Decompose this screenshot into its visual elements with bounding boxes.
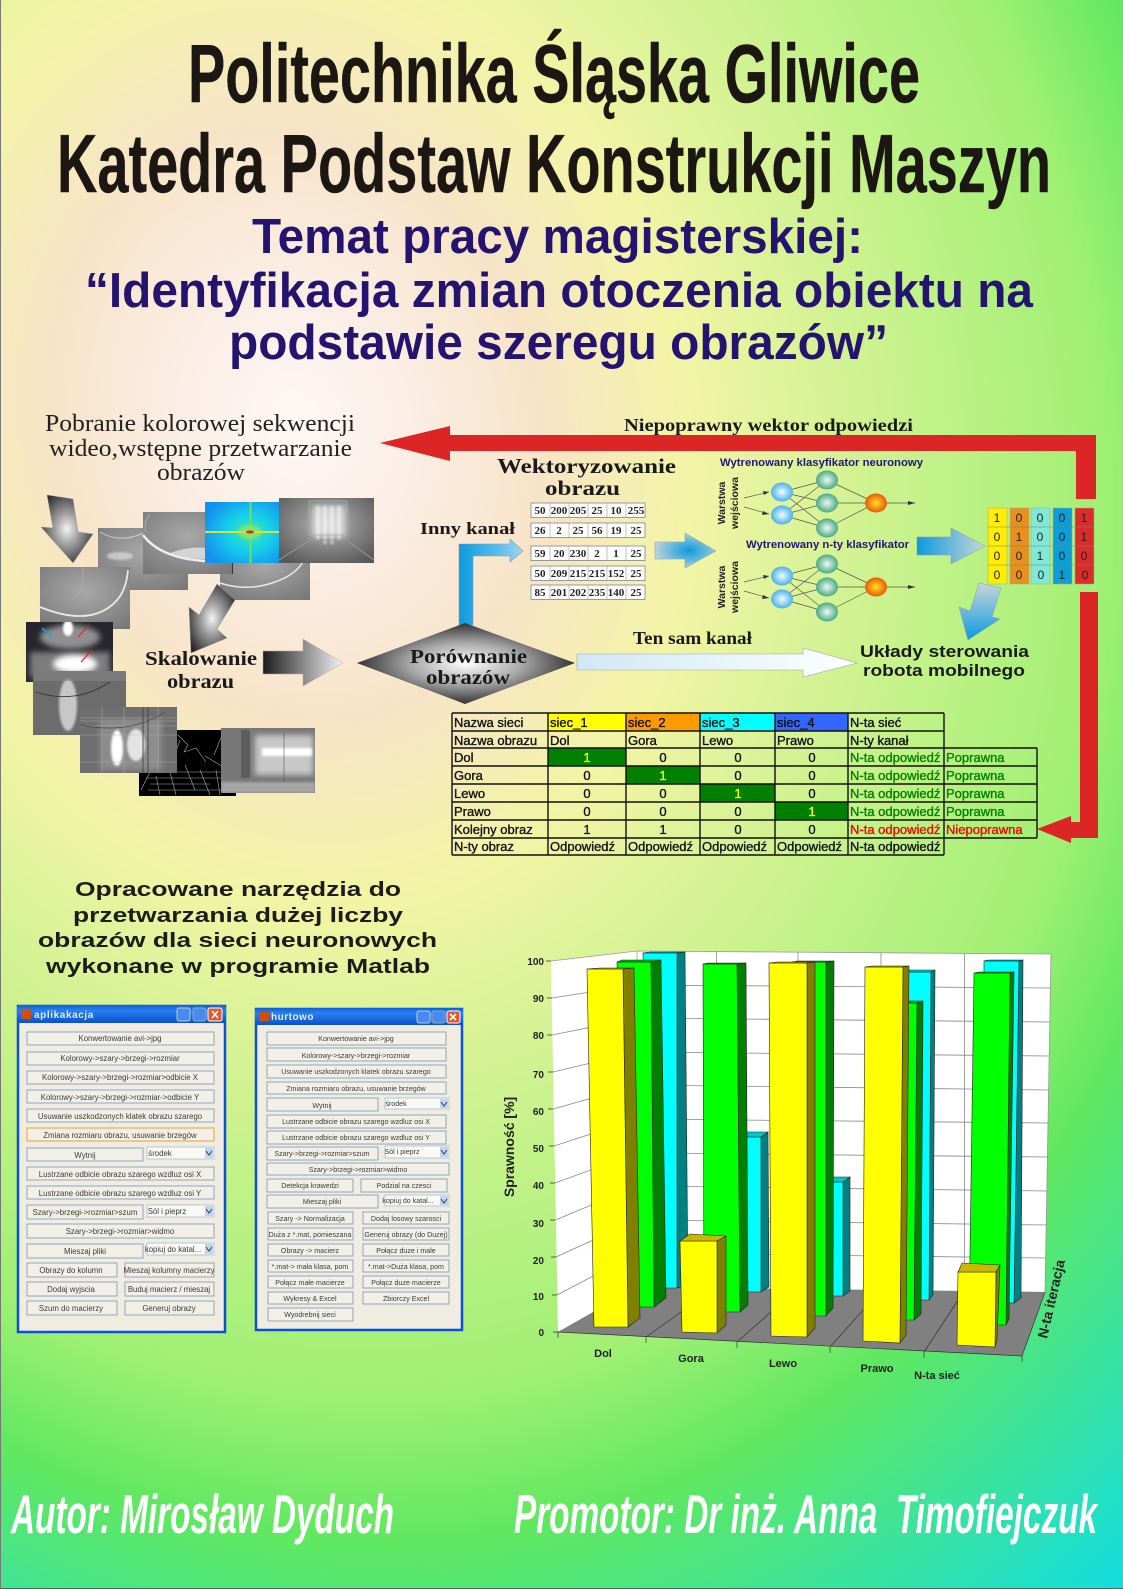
label: Niepoprawny wektor odpowiedzi: Niepoprawny wektor odpowiedzi	[624, 415, 913, 435]
results table	[452, 713, 1037, 855]
subtitle: podstawie szeregu obrazów”	[229, 316, 888, 370]
window: hurtowo: *.mat-> mała klasa, pom	[272, 1263, 348, 1271]
label: Skalowanie obrazu: Skalowanie	[145, 648, 257, 670]
results table: 1	[734, 786, 742, 801]
results table: 1	[659, 768, 667, 783]
y axis labels: 70	[533, 1070, 544, 1081]
window: hurtowo: Usuwanie uszkodzonych klatek obrazu szarego	[281, 1068, 431, 1076]
window: hurtowo: Połącz duze macierze	[371, 1279, 441, 1287]
output vector matrix: 0	[994, 549, 1001, 563]
number matrix: 255	[628, 505, 645, 517]
window: hurtowo: Detekcja krawedzi	[281, 1182, 339, 1190]
results table: 0	[808, 750, 816, 765]
neural network: top: wejściowa	[729, 477, 741, 530]
results table: 0	[734, 822, 742, 837]
output vector matrix	[988, 508, 1094, 584]
output vector matrix: 1	[1016, 530, 1023, 544]
image collage	[26, 498, 374, 796]
window: hurtowo: Obrazy -> macierz	[281, 1247, 340, 1255]
number matrix: 56	[592, 525, 603, 537]
window: aplikakacja: Obrazy do kolumn	[39, 1266, 103, 1275]
window: aplikakacja: Konwertowanie avi->jpg	[78, 1034, 162, 1043]
results table: Gora	[628, 733, 658, 748]
y axis labels: 60	[533, 1107, 544, 1118]
label: Skalowanie obrazu: obrazu	[167, 671, 234, 693]
results table: Poprawna	[946, 786, 1005, 801]
results table: 1	[583, 750, 591, 765]
heading: Wektoryzowanie obrazu: Wektoryzowanie	[497, 454, 676, 478]
results table: 0	[808, 822, 816, 837]
results table: Poprawna	[946, 804, 1005, 819]
output vector matrix: 0	[994, 530, 1001, 544]
y axis labels: 40	[533, 1181, 544, 1192]
output vector matrix: 0	[1038, 568, 1045, 582]
results table: Poprawna	[946, 768, 1005, 783]
window: hurtowo: Konwertowanie avi->jpg	[318, 1035, 394, 1043]
photo: pipe view 4	[40, 567, 130, 629]
results table: 1	[659, 822, 667, 837]
photo: processed interior with stripes	[80, 707, 177, 773]
window: hurtowo: Duża z *.mat, pomieszana	[269, 1231, 351, 1239]
number matrix: 202	[570, 587, 587, 599]
number matrix: 25	[630, 525, 642, 537]
arrow: other channel	[459, 539, 523, 625]
window: hurtowo: Sól i pieprz	[384, 1148, 420, 1156]
heading: Wektoryzowanie obrazu: obrazu	[545, 476, 620, 500]
arrow: down into images	[41, 495, 93, 563]
subtitle	[85, 210, 1034, 370]
3D bar chart	[501, 951, 1068, 1382]
window: aplikakacja: Szary->brzegi->rozmiar>szum	[33, 1208, 137, 1217]
decision diamond: Porównanie obrazów: obrazów	[426, 667, 511, 689]
red arrow: to results table	[1037, 592, 1098, 843]
number matrix: 209	[551, 568, 568, 580]
photo: pipe view 3	[220, 540, 310, 600]
label: n-th classifier: Wytrenowany n-ty klasyfikator	[746, 539, 910, 551]
output vector matrix: 0	[1059, 549, 1066, 563]
number matrix: 25	[630, 548, 642, 560]
window: hurtowo	[255, 1008, 463, 1330]
photo: interior wide	[221, 728, 315, 793]
neural network: bottom	[716, 539, 915, 622]
heading: tools: przetwarzania dużej liczby	[73, 905, 404, 927]
window: aplikakacja: Lustrzane odbicie obrazu szarego wzdluz osi X	[39, 1170, 202, 1179]
results table: Prawo	[454, 804, 491, 819]
results table: 0	[659, 786, 667, 801]
results table: 0	[734, 750, 742, 765]
label: robot control systems: Układy sterowania	[860, 642, 1030, 661]
decision diamond: Porównanie obrazów	[357, 623, 575, 704]
y axis labels: 100	[527, 957, 544, 968]
bars: green series	[617, 960, 1014, 1325]
window: hurtowo: Podzial na czesci	[377, 1182, 432, 1190]
results table: siec_4	[777, 715, 815, 730]
number matrix: 85	[534, 587, 546, 599]
results table: 1	[583, 822, 591, 837]
window: hurtowo: Mieszaj pliki	[303, 1198, 342, 1206]
number matrix: 2	[556, 525, 562, 537]
output vector matrix: 1	[1081, 530, 1088, 544]
output vector matrix: 0	[1037, 530, 1044, 544]
category labels: Dol	[594, 1348, 612, 1360]
category labels: Lewo	[769, 1358, 797, 1370]
results table: N-ty obraz	[454, 839, 514, 854]
number matrix: 10	[610, 505, 622, 517]
number matrix: 205	[570, 505, 587, 517]
results table: N-ta odpowiedź	[850, 822, 940, 837]
results table: siec_3	[702, 715, 740, 730]
photo: pipe view 1	[98, 528, 188, 590]
window: hurtowo: Dodaj losowy szarosci	[371, 1215, 442, 1223]
results table: Niepoprawna	[946, 822, 1023, 837]
results table: siec_1	[550, 715, 588, 730]
results table: Odpowiedź	[628, 839, 693, 854]
window: hurtowo: środek	[385, 1100, 407, 1108]
window: hurtowo: Wyodrebnij sieci	[284, 1311, 336, 1319]
results table: 0	[734, 768, 742, 783]
number matrix: 25	[572, 525, 584, 537]
results table: N-ta sieć	[850, 715, 902, 730]
number matrix: 50	[534, 505, 546, 517]
image: Fourier spectrum	[205, 502, 279, 563]
results table: Lewo	[454, 786, 485, 801]
bars: yellow series	[587, 962, 1000, 1347]
heading: tools: obrazów dla sieci neuronowych	[38, 930, 437, 952]
window: aplikakacja: Mieszaj kolumny macierzy	[124, 1266, 215, 1275]
photo: noisy interior	[33, 671, 126, 735]
results table: 0	[583, 768, 591, 783]
window: hurtowo: Kolorowy->szary->brzegi->rozmiar	[302, 1052, 411, 1060]
subtitle: “Identyfikacja zmian otoczenia obiektu na	[85, 264, 1034, 318]
photo: bright interior	[279, 498, 374, 563]
decision diamond: Porównanie obrazów: Porównanie	[410, 646, 527, 668]
results table: 0	[659, 804, 667, 819]
results table: 0	[734, 804, 742, 819]
authors	[10, 1483, 1098, 1545]
output vector matrix: 1	[994, 511, 1001, 525]
window: hurtowo: *.mat->Duża klasa, pom	[368, 1263, 444, 1271]
window: hurtowo: Generuj obrazy (do Duzej)	[364, 1231, 448, 1239]
label: Skalowanie obrazu	[145, 648, 257, 693]
number matrix: 50	[534, 568, 546, 580]
heading: video sequence: obrazów	[157, 460, 246, 486]
results table: Dol	[550, 733, 570, 748]
y axis labels: Sprawność [%]	[501, 1097, 517, 1197]
heading: video sequence	[45, 411, 355, 486]
window: hurtowo: Lustrzane odbicie obrazu szarego wzdluz osi Y	[282, 1134, 430, 1142]
neural network: top	[716, 457, 924, 538]
results table: Gora	[454, 768, 484, 783]
label: Ten sam kanał: Ten sam kanał	[633, 628, 752, 648]
title bar	[255, 1008, 463, 1025]
title	[57, 27, 1051, 210]
red feedback arrow	[380, 426, 1096, 499]
output vector matrix: 0	[1016, 568, 1023, 582]
output vector matrix: 1	[1059, 568, 1066, 582]
number matrix	[531, 503, 645, 600]
heading: tools: wykonane w programie Matlab	[45, 956, 430, 978]
arrow: scaling to comparison	[263, 639, 343, 686]
results table: Odpowiedź	[550, 839, 615, 854]
output vector matrix: 0	[994, 568, 1001, 582]
category labels: N-ta sieć	[914, 1370, 960, 1382]
number matrix: 25	[630, 587, 642, 599]
window: hurtowo: Szary->brzegi->rozmiar>szum	[274, 1150, 370, 1158]
output vector matrix: 1	[1037, 549, 1044, 563]
window: hurtowo: Wytnij	[312, 1102, 332, 1110]
number matrix: 20	[554, 548, 565, 560]
y axis labels: 0	[538, 1328, 544, 1339]
window: aplikakacja	[17, 1005, 226, 1332]
label: trained classifier: Wytrenowany klasyfikator neuronowy	[720, 457, 924, 469]
photo: dark interior with arrows	[26, 620, 113, 682]
neural network: top: Warstwa	[716, 481, 728, 524]
output vector matrix: 1	[1081, 511, 1088, 525]
window: hurtowo: Zmiana rozmiaru obrazu, usuwanie brzegów	[286, 1085, 427, 1093]
heading: video sequence: wideo,wstępne przetwarzanie	[49, 436, 352, 462]
window: hurtowo: Połącz duze i male	[376, 1247, 436, 1255]
window: aplikakacja: Zmiana rozmiaru obrazu, usuwanie brzegów	[43, 1131, 197, 1140]
results table: Poprawna	[946, 750, 1005, 765]
category labels: Gora	[678, 1353, 705, 1365]
window: aplikakacja: Kolorowy->szary->brzegi->rozmiar	[60, 1054, 180, 1063]
number matrix: 152	[608, 568, 625, 580]
window: aplikakacja: Szum do macierzy	[39, 1304, 103, 1313]
neural network: bottom: wejściowa	[729, 561, 741, 614]
results table: N-ta odpowiedź	[850, 804, 940, 819]
window: aplikakacja: Generuj obrazy	[142, 1304, 196, 1313]
arrow: same channel	[577, 648, 857, 677]
window: aplikakacja: Wytnij	[74, 1151, 96, 1160]
window: aplikakacja: Lustrzane odbicie obrazu szarego wzdluz osi Y	[39, 1189, 202, 1198]
heading: tools	[38, 879, 437, 978]
number matrix: 2	[594, 548, 600, 560]
results table: 0	[808, 786, 816, 801]
window: hurtowo: Szary->brzegi->rozmiar>widmo	[309, 1166, 407, 1174]
results table: 0	[583, 804, 591, 819]
number matrix: 201	[551, 587, 567, 599]
photo: pipe view 2	[143, 512, 233, 574]
window: hurtowo: kopiuj do katal...	[382, 1197, 434, 1205]
window: hurtowo: Zbiorczy Excel	[383, 1295, 429, 1303]
window: aplikakacja: Mieszaj pliki	[64, 1247, 106, 1256]
label: Inny kanał: Inny kanał	[420, 519, 515, 538]
y axis labels: 10	[533, 1292, 544, 1303]
number matrix: 235	[589, 587, 606, 599]
label: robot control systems: robota mobilnego	[863, 661, 1025, 680]
results table: 0	[583, 786, 591, 801]
results table: N-ta odpowiedź	[850, 786, 940, 801]
arrow: classifier to output	[917, 528, 985, 564]
arrow: matrix to classifier	[655, 533, 716, 568]
window: hurtowo: Szary -> Normalizacja	[275, 1215, 345, 1223]
y axis labels: 30	[533, 1219, 544, 1230]
arrow: to scaling	[189, 584, 235, 653]
results table: 0	[659, 750, 667, 765]
results table: siec_2	[628, 715, 666, 730]
results table: Prawo	[777, 733, 814, 748]
number matrix: 19	[610, 525, 622, 537]
image: edge detection	[139, 730, 236, 796]
number matrix: 230	[570, 548, 587, 560]
number matrix: 140	[608, 587, 625, 599]
title bar: hurtowo	[271, 1012, 314, 1023]
window: aplikakacja: środek	[148, 1149, 172, 1158]
category labels: N-ta iteracja	[1034, 1258, 1068, 1340]
results table: Odpowiedź	[702, 839, 767, 854]
title bar	[17, 1005, 226, 1023]
authors: Autor: Mirosław Dyduch	[10, 1483, 394, 1545]
category labels	[594, 1258, 1068, 1382]
output vector matrix: 0	[1037, 511, 1044, 525]
y axis labels	[501, 957, 544, 1339]
neural network: bottom: Warstwa	[716, 565, 728, 608]
category labels: Prawo	[860, 1363, 894, 1375]
heading: Wektoryzowanie obrazu	[497, 454, 676, 500]
window: aplikakacja: Kolorowy->szary->brzegi->rozmiar>odbicie X	[42, 1073, 199, 1082]
output vector matrix: 0	[1082, 568, 1089, 582]
heading: video sequence: Pobranie kolorowej sekwencji	[45, 411, 355, 437]
window: aplikakacja: Szary->brzegi->rozmiar>widmo	[66, 1227, 175, 1236]
y axis labels: 90	[533, 994, 544, 1005]
results table: Nazwa sieci	[454, 715, 523, 730]
results table: 0	[808, 768, 816, 783]
window: aplikakacja: Dodaj wyjscia	[47, 1285, 95, 1294]
number matrix: 59	[534, 548, 546, 560]
number matrix: 215	[589, 568, 606, 580]
results table: Odpowiedź	[777, 839, 842, 854]
output vector matrix: 0	[1059, 511, 1066, 525]
window: aplikakacja: kopiuj do katal...	[145, 1245, 201, 1254]
arrow: output to robot control	[959, 583, 1001, 640]
subtitle: Temat pracy magisterskiej:	[252, 210, 863, 264]
number matrix: 1	[613, 548, 619, 560]
output vector matrix: 0	[1016, 511, 1023, 525]
number matrix: 215	[570, 568, 587, 580]
results table: Kolejny obraz	[454, 822, 533, 837]
results table: N-ta odpowiedź	[850, 750, 940, 765]
window: hurtowo: Połącz małe macierze	[275, 1279, 345, 1287]
window: hurtowo: Lustrzane odbicie obrazu szarego wzdluz osi X	[282, 1118, 430, 1126]
y axis labels: 80	[533, 1031, 544, 1042]
window: aplikakacja: Kolorowy->szary->brzegi->rozmiar->odbicie Y	[41, 1093, 200, 1102]
number matrix: 26	[534, 525, 546, 537]
chart walls and floor	[546, 951, 1051, 1362]
results table: N-ta odpowiedź	[850, 768, 940, 783]
y axis labels: 50	[533, 1144, 544, 1155]
y axis labels: 20	[533, 1256, 544, 1267]
output vector matrix: 0	[1081, 549, 1088, 563]
results table: Nazwa obrazu	[454, 733, 537, 748]
heading: tools: Opracowane narzędzia do	[75, 879, 401, 901]
number matrix: 25	[630, 568, 642, 580]
title bar: aplikakacja	[34, 1010, 94, 1021]
bars: cyan series	[643, 952, 1023, 1303]
label: robot control systems	[860, 642, 1030, 680]
results table: N-ty kanał	[850, 733, 909, 748]
number matrix: 200	[551, 505, 568, 517]
results table: Lewo	[702, 733, 733, 748]
results table: Dol	[454, 750, 474, 765]
number matrix: 25	[592, 505, 603, 517]
output vector matrix: 0	[1059, 530, 1066, 544]
results table: 1	[808, 804, 816, 819]
window: aplikakacja: Sól i pieprz	[148, 1207, 186, 1216]
window: aplikakacja: Usuwanie uszkodzonych klatek obrazu szarego	[38, 1112, 203, 1121]
output vector matrix: 0	[1016, 549, 1023, 563]
window: aplikakacja: Buduj macierz / mieszaj	[128, 1285, 210, 1294]
results table: N-ta odpowiedź	[850, 839, 940, 854]
window: hurtowo: Wykresy & Excel	[283, 1295, 337, 1303]
